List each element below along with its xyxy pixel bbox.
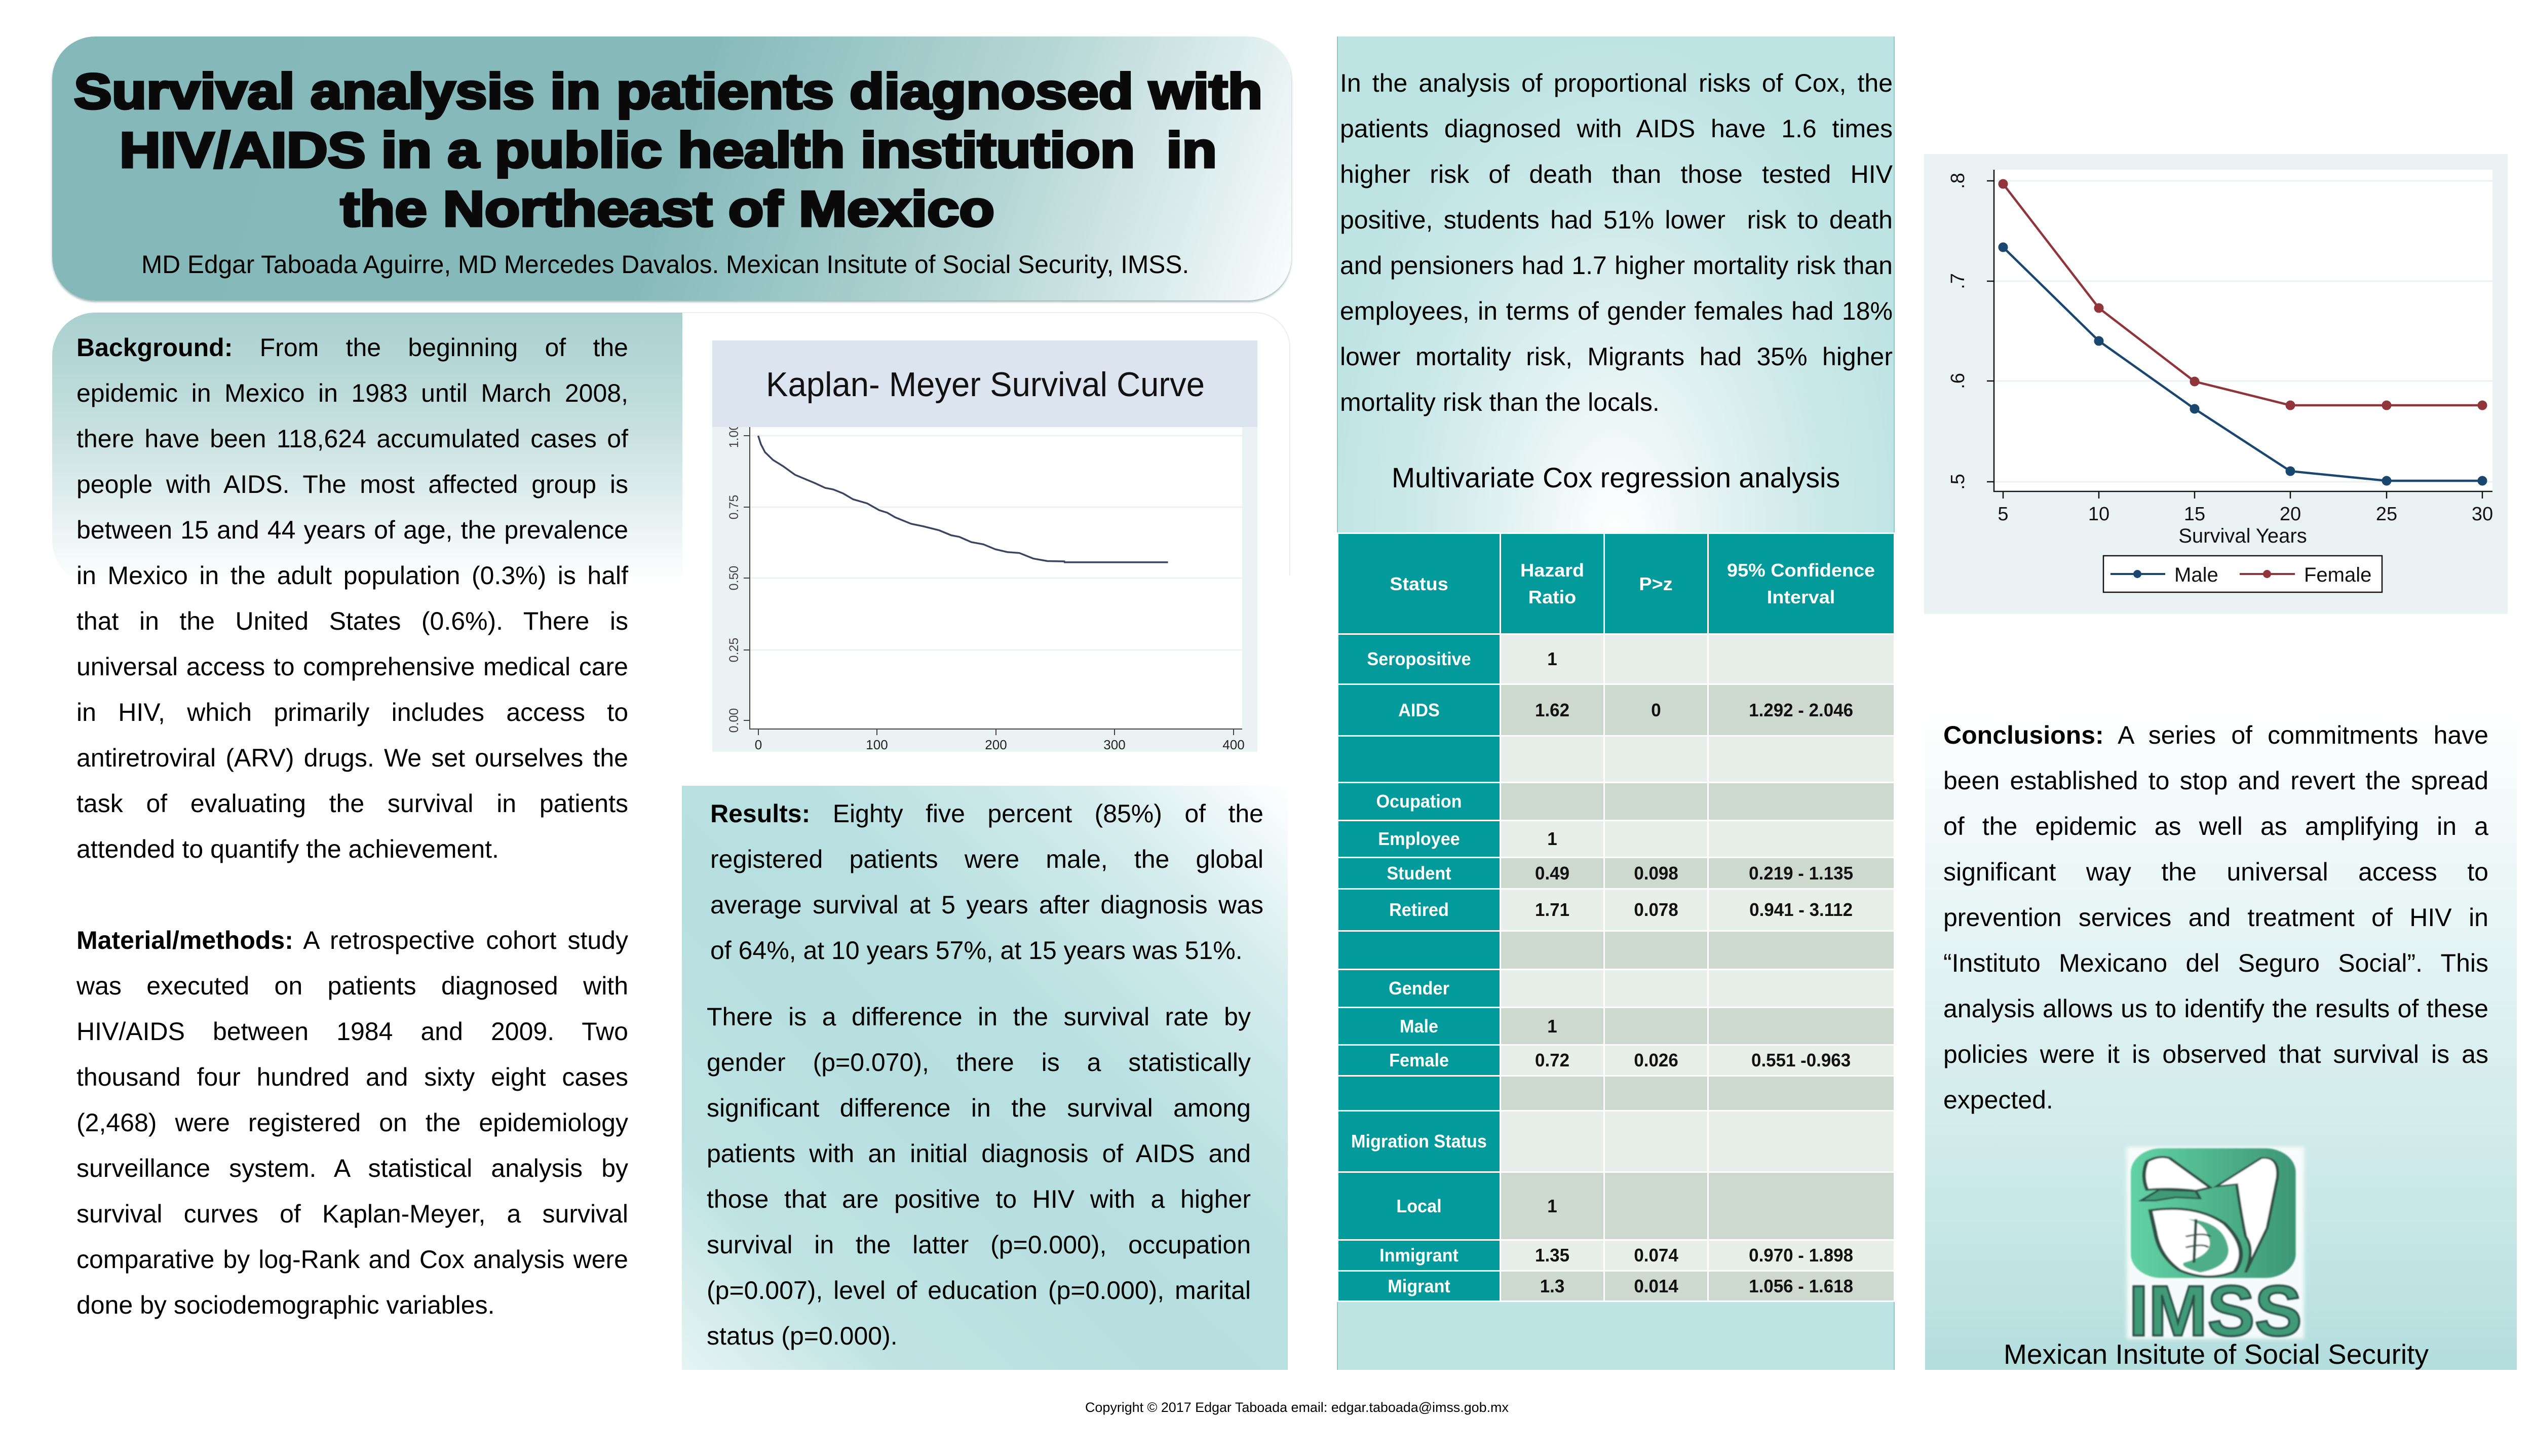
- text: Cox findings: [1340, 69, 1893, 416]
- footer: copyright: Copyright © 2017 Edgar Taboada email: edgar.taboada@imss.gob.mx: [1085, 1400, 1509, 1415]
- text: conclusions: “Instituto Mexicano del Seguro Social”. This: [1943, 949, 2488, 977]
- text: background: universal access to comprehensive medical care: [76, 653, 628, 681]
- text: Cox findings: employees, in terms of gender females had 18%: [1340, 297, 1893, 325]
- text: survival differences: survival in the latter (p=0.000), occupation: [707, 1231, 1251, 1259]
- text: Cox findings: higher risk of death than those tested HIV: [1340, 160, 1893, 188]
- panel: results: [682, 786, 1288, 1370]
- table: multivariate Cox regression: 0.970 - 1.898: [1749, 1245, 1853, 1266]
- table: multivariate Cox regression: 1.056 - 1.618: [1749, 1276, 1853, 1296]
- text: conclusions: significant way the universal access to: [1943, 858, 2488, 886]
- panel: conclusions: [1925, 709, 2517, 1370]
- text: survival differences: status (p=0.000).: [707, 1322, 898, 1350]
- chart title band: [712, 340, 1257, 427]
- text: survival differences: (p=0.007), level of education (p=0.000), marital: [707, 1276, 1251, 1305]
- text: background: attended to quantify the achievement.: [76, 835, 499, 863]
- table: multivariate Cox regression: Migrant: [1388, 1276, 1450, 1296]
- y axis labels: .7: [1947, 273, 1969, 289]
- x axis labels: [755, 737, 1245, 752]
- text: survival differences: There is a difference in the survival rate by: [707, 1003, 1251, 1031]
- text: conclusions: Conclusions: A series of commitments have: [1943, 721, 2488, 749]
- x axis labels: 5: [1998, 504, 2009, 525]
- text: background: antiretroviral (ARV) drugs. We set ourselves the: [76, 744, 628, 772]
- text: background: people with AIDS. The most affected group is: [76, 470, 628, 499]
- text: material and methods: surveillance system. A statistical analysis by: [76, 1154, 628, 1182]
- text: Cox findings: In the analysis of proportional risks of Cox, the: [1340, 69, 1893, 97]
- table: multivariate Cox regression: 1: [1547, 648, 1557, 669]
- table: multivariate Cox regression: 0.49: [1535, 862, 1569, 884]
- table: multivariate Cox regression: 1.35: [1535, 1245, 1569, 1266]
- y axis labels: 0.75: [727, 495, 741, 519]
- text: background: task of evaluating the survival in patients: [76, 789, 628, 818]
- table: multivariate Cox regression: Interval: [1767, 587, 1835, 607]
- text: material and methods: [76, 926, 628, 1319]
- text: material and methods: HIV/AIDS between 1984 and 2009. Two: [76, 1017, 628, 1046]
- text: conclusions: expected.: [1943, 1086, 2053, 1114]
- text: background: in HIV, which primarily includes access to: [76, 698, 628, 726]
- x axis labels: 10: [2088, 504, 2109, 525]
- table: multivariate Cox regression: Local: [1396, 1196, 1442, 1216]
- y axis labels: 0.25: [727, 638, 741, 662]
- table: multivariate Cox regression: 0.026: [1634, 1050, 1678, 1070]
- y axis labels: 0.00: [727, 708, 741, 733]
- text: results: average survival at 5 years after diagnosis was: [710, 891, 1263, 919]
- x axis title: Survival Years: [2178, 525, 2307, 547]
- text: Cox findings: mortality risk than the locals.: [1340, 388, 1660, 416]
- text: results: [710, 799, 1263, 965]
- table: multivariate Cox regression: Student: [1387, 862, 1451, 884]
- y axis labels: .6: [1947, 373, 1969, 389]
- male series: [1999, 243, 2487, 485]
- survival curve line: [758, 436, 1168, 562]
- text: background: [76, 333, 628, 863]
- text: results: of 64%, at 10 years 57%, at 15 years was 51%.: [710, 936, 1243, 965]
- text: conclusions: been established to stop and revert the spread: [1943, 767, 2488, 795]
- text: background: that in the United States (0.6%). There is: [76, 607, 628, 635]
- text: background: in Mexico in the adult population (0.3%) is half: [76, 561, 628, 590]
- table: multivariate Cox regression: 1: [1547, 828, 1557, 849]
- title: Survival analysis in patients diagnosed with: [74, 63, 1262, 119]
- text: material and methods: Material/methods: A retrospective cohort study: [76, 926, 628, 954]
- table: multivariate Cox regression: 0.074: [1634, 1245, 1678, 1266]
- table: multivariate Cox regression: 95% Confidence: [1728, 560, 1875, 581]
- text: material and methods: done by sociodemographic variables.: [76, 1291, 494, 1319]
- table: multivariate Cox regression: Gender: [1389, 978, 1449, 999]
- chart: survival by gender: [1924, 154, 2508, 614]
- text: Cox findings: and pensioners had 1.7 higher mortality risk than: [1340, 251, 1893, 280]
- text: background: there have been 118,624 accumulated cases of: [76, 425, 628, 453]
- y axis labels: [1947, 173, 1969, 490]
- heading: Cox table: Multivariate Cox regression analysis: [1392, 462, 1840, 493]
- table: multivariate Cox regression: 0.72: [1535, 1050, 1569, 1070]
- text: background: Background: From the beginning of the: [76, 333, 628, 362]
- table: multivariate Cox regression: P>z: [1639, 573, 1673, 594]
- text: material and methods: comparative by log-Rank and Cox analysis were: [76, 1245, 628, 1274]
- text: conclusions: [1943, 721, 2488, 1114]
- legend: Female: [2304, 564, 2371, 586]
- table: multivariate Cox regression: Status: [1390, 573, 1448, 594]
- y axis labels: 1.00: [727, 424, 741, 448]
- text: background: epidemic in Mexico in 1983 until March 2008,: [76, 379, 628, 407]
- y axis labels: [727, 424, 741, 733]
- y axis labels: .8: [1947, 173, 1969, 189]
- text: conclusions: policies were it is observed that survival is as: [1943, 1040, 2488, 1068]
- table: multivariate Cox regression: Migration Status: [1351, 1131, 1487, 1152]
- table: multivariate Cox regression: 1.3: [1540, 1276, 1564, 1296]
- table: multivariate Cox regression: 0.014: [1634, 1276, 1678, 1296]
- legend: Male: [2174, 564, 2218, 586]
- table: multivariate Cox regression: Female: [1389, 1050, 1449, 1070]
- table: multivariate Cox regression: 0.078: [1634, 899, 1678, 920]
- x axis labels: 15: [2184, 504, 2205, 525]
- chart: Kaplan-Meyer survival curve: [712, 340, 1257, 752]
- text: Cox findings: positive, students had 51% lower risk to death: [1340, 206, 1893, 234]
- table: multivariate Cox regression: Seropositive: [1367, 648, 1471, 669]
- table: multivariate Cox regression: 0: [1651, 699, 1661, 720]
- text: survival differences: patients with an initial diagnosis of AIDS and: [707, 1139, 1251, 1168]
- female series: [1999, 179, 2487, 410]
- y axis labels: .5: [1947, 474, 1969, 490]
- text: material and methods: (2,468) were registered on the epidemiology: [76, 1108, 628, 1137]
- text: conclusions: of the epidemic as well as amplifying in a: [1943, 812, 2488, 840]
- table: multivariate Cox regression: AIDS: [1398, 699, 1440, 720]
- table: multivariate Cox regression: 1.71: [1535, 899, 1569, 920]
- text: background: between 15 and 44 years of age, the prevalence: [76, 516, 628, 544]
- panel: background gradient: [52, 313, 682, 584]
- text: results: Results: Eighty five percent (85%) of the: [710, 799, 1263, 828]
- table: multivariate Cox regression: 1.62: [1535, 699, 1569, 720]
- text: survival differences: those that are positive to HIV with a higher: [707, 1185, 1251, 1213]
- text: material and methods: was executed on patients diagnosed with: [76, 972, 628, 1000]
- logo caption: Mexican Insitute of Social Security: [2004, 1338, 2429, 1370]
- title: [74, 63, 1262, 237]
- table: multivariate Cox regression: 1.292 - 2.046: [1749, 699, 1853, 720]
- text: Cox findings: lower mortality risk, Migrants had 35% higher: [1340, 342, 1893, 371]
- chart title band: Kaplan- Meyer Survival Curve: [766, 365, 1205, 404]
- title: the Northeast of Mexico: [340, 181, 994, 237]
- text: conclusions: prevention services and treatment of HIV in: [1943, 903, 2488, 932]
- text: survival differences: [707, 1003, 1251, 1350]
- text: survival differences: significant difference in the survival among: [707, 1094, 1251, 1122]
- table: multivariate Cox regression: Hazard: [1520, 560, 1584, 581]
- text: Cox findings: patients diagnosed with AIDS have 1.6 times: [1340, 114, 1893, 143]
- panel: Cox analysis: [1337, 36, 1895, 1370]
- table: multivariate Cox regression: Inmigrant: [1379, 1245, 1459, 1266]
- table: multivariate Cox regression: 0.219 - 1.135: [1749, 862, 1853, 884]
- table: multivariate Cox regression: 1: [1547, 1015, 1557, 1037]
- table: multivariate Cox regression: Male: [1400, 1015, 1438, 1037]
- table: multivariate Cox regression: 1: [1547, 1196, 1557, 1216]
- table: multivariate Cox regression: Employee: [1378, 828, 1460, 849]
- authors: MD Edgar Taboada Aguirre, MD Mercedes Davalos. Mexican Insitute of Social Security, IMSS.: [141, 250, 1189, 279]
- title: HIV/AIDS in a public health institution in: [120, 122, 1217, 178]
- legend: [2103, 556, 2382, 592]
- table: multivariate Cox regression: 0.551 -0.963: [1751, 1050, 1851, 1070]
- panel: chart area outline: [682, 312, 1290, 576]
- table: multivariate Cox regression: Ratio: [1528, 587, 1576, 607]
- table: multivariate Cox regression: 0.941 - 3.112: [1750, 899, 1853, 920]
- table: multivariate Cox regression: Retired: [1389, 899, 1449, 920]
- table: multivariate Cox regression: 0.098: [1634, 862, 1678, 884]
- text: results: registered patients were male, the global: [710, 845, 1263, 873]
- panel: title banner: [52, 36, 1291, 300]
- text: conclusions: analysis allows us to identify the results of these: [1943, 994, 2488, 1023]
- text: survival differences: gender (p=0.070), there is a statistically: [707, 1048, 1251, 1077]
- text: material and methods: thousand four hundred and sixty eight cases: [76, 1063, 628, 1091]
- text: material and methods: survival curves of Kaplan-Meyer, a survival: [76, 1200, 628, 1228]
- x axis labels: 20: [2280, 504, 2301, 525]
- x axis labels: 30: [2472, 504, 2493, 525]
- y axis labels: 0.50: [727, 566, 741, 590]
- icon: IMSS logo: [2123, 1144, 2308, 1343]
- x axis labels: 25: [2376, 504, 2397, 525]
- table: multivariate Cox regression: [1337, 532, 1895, 1302]
- table: multivariate Cox regression: Ocupation: [1376, 791, 1462, 812]
- x axis labels: [1998, 504, 2493, 525]
